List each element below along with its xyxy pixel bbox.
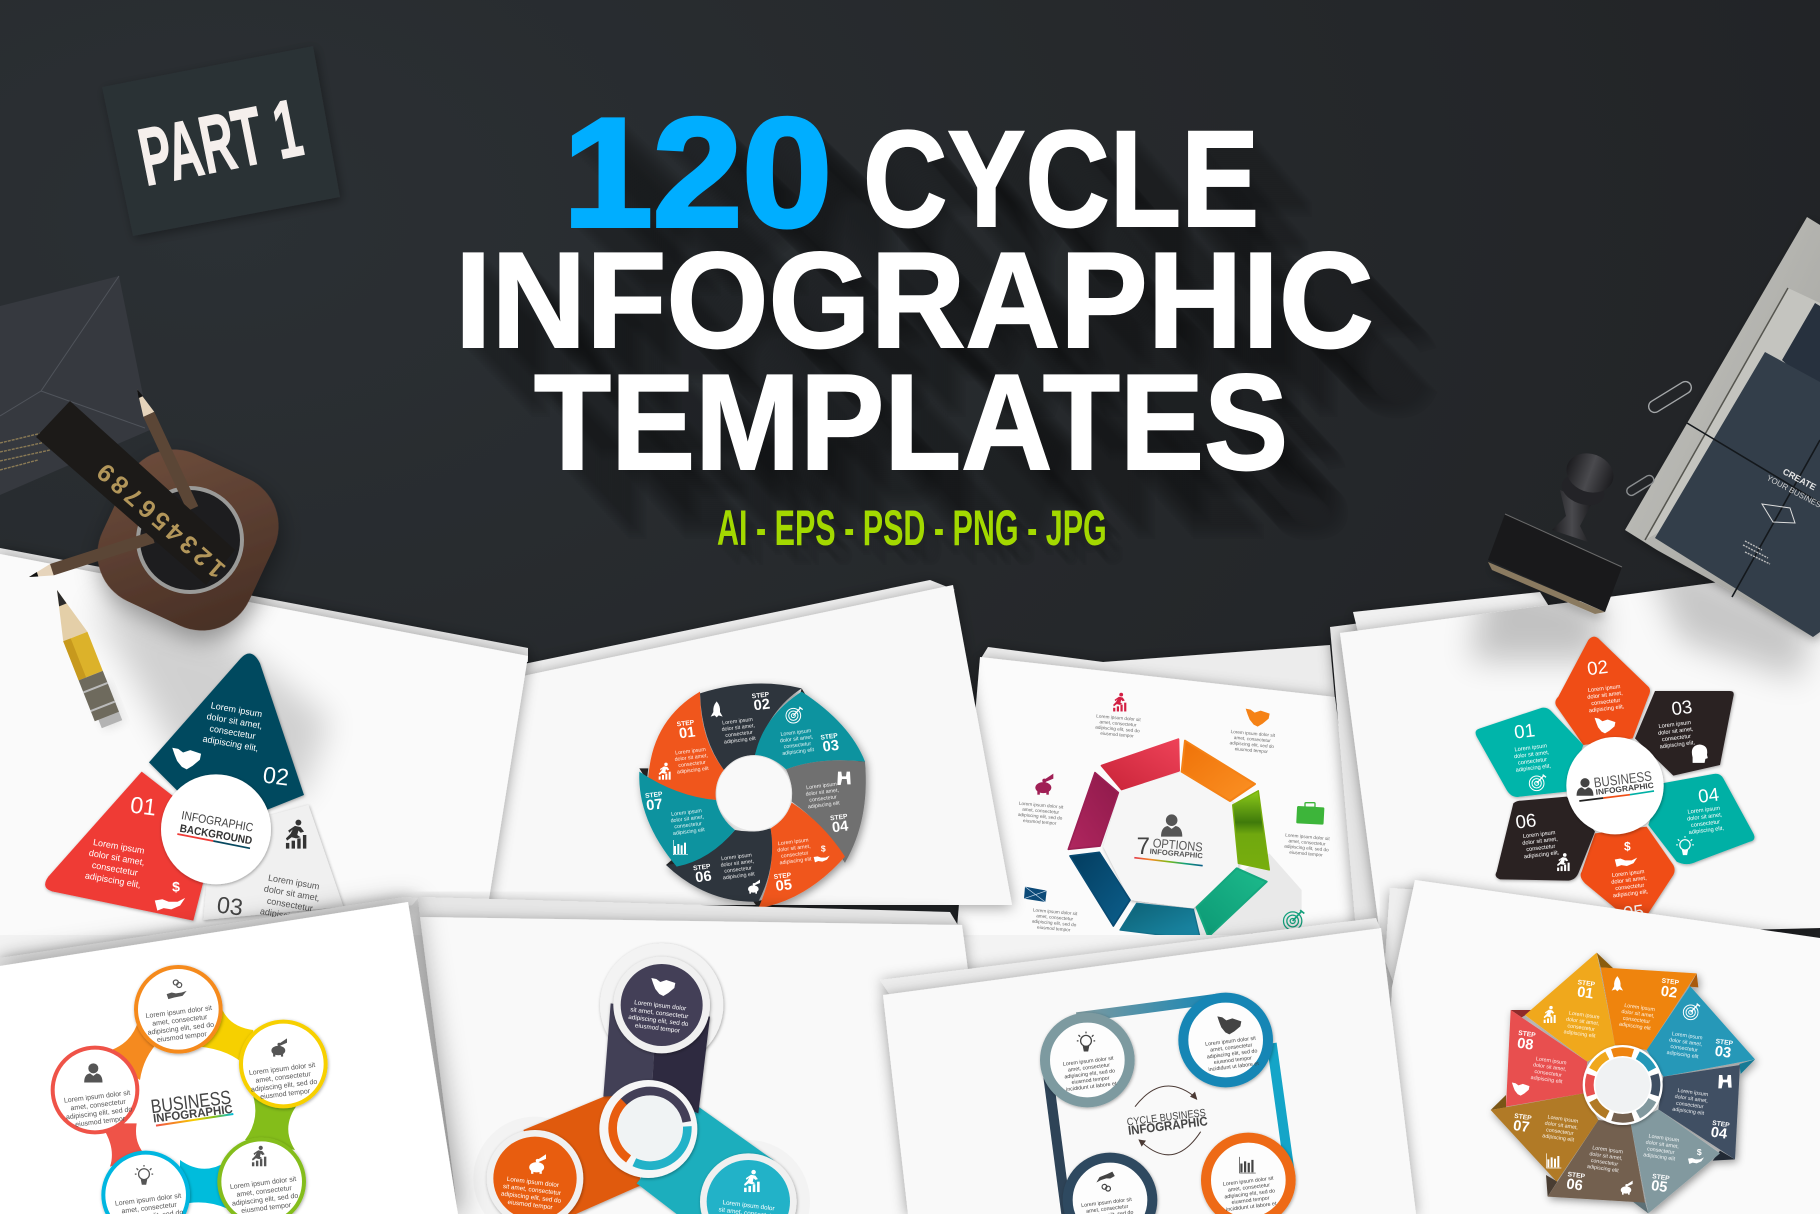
wheel segments bbox=[639, 684, 866, 908]
spiral seven-step wheel: $ bbox=[821, 844, 826, 854]
sheet: spiral back bbox=[490, 580, 955, 690]
loop infographic: incididunt ut labore et bbox=[1066, 1081, 1117, 1093]
flower infographic: dolor sit amet, bbox=[1522, 837, 1558, 847]
octagon infographic: STEP bbox=[1518, 1030, 1537, 1039]
loop infographic: amet, consectetur bbox=[1210, 1042, 1253, 1054]
centre title bbox=[1126, 1086, 1208, 1155]
five-ring infographic: Lorem ipsum dolor sit bbox=[64, 1090, 131, 1105]
panel: flower sheet bbox=[1340, 540, 1820, 935]
loop infographic: adipiscing elit, sed do bbox=[1064, 1068, 1115, 1080]
spiral seven-step wheel: adipiscing elit bbox=[723, 871, 756, 881]
centre circle: BACKGROUND bbox=[179, 823, 253, 847]
sheet: loop back bbox=[880, 918, 1380, 995]
triangle infographic: dolor sit amet, bbox=[263, 883, 321, 903]
orange disc: adipiscing elit, sed do bbox=[501, 1190, 562, 1205]
flower infographic: dolor sit amet, bbox=[1587, 691, 1623, 701]
centre circle: INFOGRAPHIC bbox=[180, 808, 255, 835]
octagon infographic: STEP bbox=[1712, 1120, 1731, 1129]
octagon infographic: adipiscing elit bbox=[1619, 1022, 1652, 1032]
octagon infographic: consectetur bbox=[1670, 1044, 1698, 1054]
heptagon infographic: adipiscing elit, sed do bbox=[1284, 844, 1329, 852]
spiral seven-step wheel: adipiscing elit bbox=[779, 856, 812, 866]
pencil: brown upper bbox=[132, 386, 198, 511]
octagon infographic: 07 bbox=[1512, 1118, 1530, 1136]
centre title: BUSINESS bbox=[150, 1088, 232, 1118]
octagon infographic: Lorem ipsum bbox=[1568, 1011, 1600, 1021]
flower infographic: consectetur bbox=[1691, 819, 1721, 829]
octagon infographic: 03 bbox=[1714, 1044, 1732, 1062]
segment 02 bbox=[149, 654, 304, 830]
orange disc: sit amet, consectetur bbox=[503, 1183, 561, 1197]
loop infographic: incididunt ut labore et bbox=[1226, 1201, 1277, 1213]
heptagon infographic: 7 bbox=[1137, 833, 1150, 860]
spiral seven-step wheel: Lorem ipsum bbox=[675, 747, 707, 757]
spiral seven-step wheel: STEP bbox=[751, 691, 770, 700]
flower infographic: dolor sit amet, bbox=[1687, 812, 1723, 823]
flower infographic bbox=[1476, 637, 1754, 924]
petal 02 bbox=[1555, 637, 1650, 745]
heptagon infographic: adipiscing elit, sed do bbox=[1095, 725, 1140, 733]
petal 04 bbox=[1648, 774, 1754, 864]
loop infographic: amet, consectetur bbox=[1068, 1062, 1111, 1074]
heptagon infographic: amet, consectetur bbox=[1022, 807, 1060, 815]
orange disc: Lorem ipsum dolor bbox=[506, 1176, 559, 1189]
spiral seven-step wheel: STEP bbox=[830, 813, 848, 822]
spiral seven-step wheel: 06 bbox=[694, 868, 713, 886]
octagon infographic: consectetur bbox=[1676, 1101, 1704, 1110]
ring: blue bbox=[103, 1153, 188, 1214]
stamp bbox=[1488, 447, 1622, 614]
sheet: triangle back bbox=[0, 548, 528, 662]
spiral seven-step wheel: dolor sit amet, bbox=[670, 814, 704, 824]
soft shadow behind holder bbox=[90, 600, 330, 800]
octagon infographic: dolor sit amet, bbox=[1589, 1151, 1623, 1162]
notebook: CREATE bbox=[1781, 466, 1818, 492]
octagon infographic: 02 bbox=[1660, 984, 1678, 1002]
three-arm infographic bbox=[473, 943, 810, 1214]
title: INFOGRAPHIC: INFOGRAPHIC bbox=[455, 224, 1374, 376]
flower infographic: adipiscing elit, bbox=[1688, 826, 1725, 836]
heptagon infographic: Lorem ipsum dolor sit bbox=[1285, 832, 1331, 841]
ring: grey bbox=[1045, 1018, 1130, 1102]
five-ring infographic: eiusmod tempor bbox=[260, 1088, 311, 1101]
loop infographic: Lorem ipsum dolor sit bbox=[1205, 1036, 1257, 1048]
heptagon infographic: Lorem ipsum dolor sit bbox=[1251, 932, 1297, 941]
octagon infographic: STEP bbox=[1514, 1113, 1533, 1122]
heptagon infographic: eiusmod tempor bbox=[1289, 850, 1323, 858]
octagon infographic: dolor sit amet, bbox=[1645, 1140, 1679, 1150]
octagon infographic: Lorem ipsum bbox=[1535, 1056, 1567, 1067]
flower infographic: 01 bbox=[1513, 719, 1536, 743]
segment 01 bbox=[45, 772, 217, 921]
flower centre: BUSINESS bbox=[1593, 768, 1653, 791]
navy disc bbox=[613, 957, 710, 1053]
heptagon infographic: eiusmod tempor bbox=[1023, 818, 1057, 826]
octagon infographic: $ bbox=[1697, 1147, 1702, 1157]
five-ring infographic: amet, consectetur bbox=[236, 1185, 293, 1199]
triangle infographic: Lorem ipsum bbox=[267, 873, 320, 891]
sheet: octagon back bbox=[1385, 888, 1420, 1000]
centre title: CYCLE BUSINESS bbox=[1126, 1107, 1206, 1128]
file formats: AI - EPS - PSD - PNG - JPG bbox=[717, 500, 1107, 556]
flower infographic: 04 bbox=[1697, 784, 1720, 807]
petal 06 bbox=[1496, 797, 1595, 881]
flower infographic: $ bbox=[1624, 840, 1631, 854]
loop infographic: Lorem ipsum dolor sit bbox=[1081, 1197, 1133, 1209]
octagon infographic bbox=[1491, 953, 1755, 1213]
hub bbox=[597, 1076, 703, 1181]
five-ring infographic: Lorem ipsum dolor sit bbox=[249, 1062, 316, 1077]
ring: green bbox=[219, 1139, 304, 1214]
octagon infographic: adipiscing elit bbox=[1530, 1075, 1563, 1085]
heptagon infographic: Lorem ipsum dolor sit bbox=[1019, 801, 1064, 810]
title bbox=[455, 86, 1423, 556]
spiral seven-step wheel: Lorem ipsum bbox=[722, 717, 754, 727]
navy disc: sit amet, consectetur bbox=[630, 1006, 689, 1020]
loop infographic: adipiscing elit, sed do bbox=[1206, 1048, 1258, 1060]
triangle infographic: adipiscing elit, bbox=[259, 906, 317, 926]
octagon infographic: 01 bbox=[1576, 984, 1594, 1002]
octagon infographic: adipiscing elit bbox=[1672, 1107, 1705, 1117]
part 1 card bbox=[102, 46, 340, 236]
paper clip 1 bbox=[1646, 379, 1694, 415]
triangle infographic: 02 bbox=[262, 762, 290, 791]
flower infographic: 05 bbox=[1622, 900, 1645, 924]
triangle infographic: 01 bbox=[129, 792, 158, 821]
spiral seven-step wheel: Lorem ipsum bbox=[671, 808, 703, 818]
octagon infographic: adipiscing elit bbox=[1666, 1050, 1699, 1060]
octagon infographic: Lorem ipsum bbox=[1624, 1003, 1656, 1013]
flower infographic: Lorem ipsum bbox=[1514, 743, 1548, 753]
centre title bbox=[150, 1088, 234, 1126]
flower infographic: Lorem ipsum bbox=[1612, 869, 1645, 879]
spiral seven-step wheel: adipiscing elit bbox=[782, 747, 815, 757]
five-ring infographic: amet, consectetur bbox=[255, 1071, 312, 1085]
flower infographic: 02 bbox=[1586, 656, 1609, 679]
part 1 card: PART 1 bbox=[132, 82, 309, 204]
centre ring bbox=[1578, 1040, 1667, 1130]
octagon infographic: STEP bbox=[1577, 979, 1596, 989]
spiral seven-step wheel: consectetur bbox=[725, 730, 753, 739]
heptagon infographic: adipiscing elit, sed do bbox=[1032, 919, 1077, 927]
centre circle bbox=[161, 774, 271, 884]
octagon infographic: dolor sit amet, bbox=[1566, 1017, 1600, 1027]
spiral seven-step wheel: dolor sit amet, bbox=[805, 788, 839, 798]
octagon infographic: adipiscing elit bbox=[1643, 1152, 1676, 1163]
spiral seven-step wheel: consectetur bbox=[809, 794, 837, 804]
heptagon infographic: Lorem ipsum dolor sit bbox=[1230, 729, 1276, 738]
triangle infographic: adipiscing elit, bbox=[202, 734, 259, 753]
spiral seven-step wheel: STEP bbox=[645, 791, 663, 800]
spiral seven-step wheel: dolor sit amet, bbox=[720, 859, 754, 869]
heptagon infographic: amet, consectetur bbox=[1234, 735, 1271, 743]
orange disc: eiusmod tempor bbox=[507, 1199, 553, 1211]
flaps bbox=[1491, 953, 1755, 1213]
panel: business sheet bbox=[0, 902, 458, 1214]
octagon infographic: 04 bbox=[1710, 1125, 1729, 1143]
triangle infographic: consectetur bbox=[209, 723, 256, 741]
loop infographic bbox=[1045, 998, 1291, 1214]
spiral seven-step wheel: STEP bbox=[820, 733, 839, 742]
sheet: flower back 1 bbox=[1330, 600, 1570, 1000]
heptagon infographic: adipiscing elit, sed do bbox=[1229, 740, 1275, 749]
flower infographic: consectetur bbox=[1518, 757, 1548, 767]
orange arm bbox=[523, 1090, 642, 1214]
triangle infographic: 03 bbox=[216, 892, 244, 921]
octagon infographic: consectetur bbox=[1534, 1069, 1562, 1079]
flower infographic: consectetur bbox=[1526, 844, 1556, 853]
flower infographic: consectetur bbox=[1662, 734, 1692, 743]
octagon infographic: Lorem ipsum bbox=[1677, 1088, 1709, 1098]
sheet: flower back 2 bbox=[1353, 592, 1570, 640]
octagon infographic: STEP bbox=[1652, 1173, 1671, 1183]
spiral seven-step wheel: Lorem ipsum bbox=[778, 837, 809, 847]
flower infographic: adipiscing elit, bbox=[1613, 889, 1649, 899]
ring: orange bbox=[136, 967, 221, 1052]
ruler bbox=[36, 401, 235, 585]
panel: heptagon sheet bbox=[950, 657, 1375, 1010]
sheet: heptagon back bbox=[980, 645, 1335, 700]
octagon infographic: STEP bbox=[1715, 1038, 1734, 1048]
spiral seven-step wheel: adipiscing elit bbox=[673, 827, 706, 837]
segment 03 bbox=[203, 805, 343, 920]
centre title: INFOGRAPHIC bbox=[152, 1102, 234, 1126]
loop infographic: adipiscing elit, sed do bbox=[1224, 1188, 1275, 1200]
flower infographic: adipiscing elit, bbox=[1515, 763, 1552, 774]
teal disc: Lorem ipsum dolor bbox=[722, 1199, 775, 1213]
spiral seven-step wheel: consectetur bbox=[724, 865, 752, 875]
octagon infographic: 06 bbox=[1565, 1176, 1584, 1194]
heptagon infographic: Lorem ipsum dolor sit bbox=[1033, 907, 1078, 916]
spiral seven-step wheel: consectetur bbox=[674, 821, 702, 830]
paper clip 2 bbox=[1625, 474, 1655, 497]
panel: loop sheet bbox=[883, 928, 1416, 1214]
five-ring infographic: amet, consectetur bbox=[70, 1099, 127, 1112]
octagon infographic: 08 bbox=[1516, 1036, 1534, 1054]
ring: orange bbox=[1206, 1138, 1291, 1214]
navy disc: adipiscing elit, sed do bbox=[628, 1014, 689, 1028]
notebook bbox=[1625, 217, 1820, 637]
disc halos bbox=[473, 943, 810, 1214]
spiral seven-step wheel: STEP bbox=[773, 872, 792, 881]
flower infographic: adipiscing elit, bbox=[1524, 850, 1560, 860]
connecting bands bbox=[1048, 998, 1289, 1214]
panel: spiral sheet bbox=[470, 585, 1012, 908]
spiral seven-step wheel: Lorem ipsum bbox=[721, 852, 753, 862]
centre title: INFOGRAPHIC bbox=[1127, 1114, 1208, 1138]
loop infographic: Lorem ipsum dolor sit bbox=[1063, 1056, 1114, 1068]
octagon infographic: adipiscing elit bbox=[1563, 1029, 1596, 1040]
spiral seven-step wheel: STEP bbox=[676, 719, 695, 728]
octagon infographic: adipiscing elit bbox=[1587, 1164, 1620, 1174]
heptagon infographic: amet, consectetur bbox=[1036, 913, 1074, 922]
octagon infographic: consectetur bbox=[1622, 1016, 1651, 1025]
octagon infographic: consectetur bbox=[1546, 1127, 1574, 1137]
sheet: business back bbox=[0, 897, 418, 970]
triangle infographic: consectetur bbox=[91, 860, 139, 878]
octagon infographic: adipiscing elit bbox=[1542, 1133, 1575, 1144]
heptagon infographic: adipiscing elit, sed do bbox=[1018, 812, 1063, 821]
heptagon infographic: INFOGRAPHIC bbox=[1149, 847, 1204, 860]
octagon infographic: Lorem ipsum bbox=[1592, 1145, 1624, 1156]
spiral seven-step wheel: STEP bbox=[693, 863, 711, 872]
flower infographic: adipiscing elit, bbox=[1589, 704, 1625, 714]
octagon infographic: Lorem ipsum bbox=[1671, 1031, 1703, 1042]
loop infographic: incididunt ut labore et bbox=[1208, 1061, 1260, 1073]
triangle infographic: Lorem ipsum bbox=[210, 700, 263, 719]
octagon infographic: dolor sit amet, bbox=[1533, 1062, 1567, 1073]
navy disc: Lorem ipsum dolor bbox=[634, 999, 687, 1013]
heptagon infographic: Lorem ipsum dolor sit bbox=[1096, 713, 1142, 722]
loop infographic: eiusmod tempor bbox=[1231, 1195, 1270, 1206]
flower infographic: dolor sit amet, bbox=[1611, 876, 1647, 886]
title: 120: 120 bbox=[563, 86, 832, 259]
teal disc bbox=[700, 1153, 797, 1214]
spiral seven-step wheel: 05 bbox=[775, 877, 793, 895]
spiral seven-step wheel: consectetur bbox=[781, 850, 809, 860]
octagon infographic: Lorem ipsum bbox=[1648, 1134, 1680, 1144]
five-ring infographic: eiusmod tempor bbox=[157, 1031, 208, 1044]
spiral seven-step wheel: dolor sit amet, bbox=[777, 844, 811, 854]
five-ring infographic: amet, consectetur bbox=[152, 1014, 208, 1028]
panel: triangle sheet bbox=[0, 554, 528, 985]
pen holder bbox=[80, 432, 296, 648]
triangle infographic: $ bbox=[172, 879, 180, 895]
navy disc: eiusmod tempor bbox=[634, 1022, 680, 1035]
pencil: brown lower bbox=[27, 532, 155, 583]
flower infographic: Lorem ipsum bbox=[1523, 830, 1556, 840]
five-ring infographic: eiusmod tempor bbox=[75, 1116, 126, 1129]
spiral seven-step wheel: adipiscing elit bbox=[808, 800, 841, 810]
flower infographic: Lorem ipsum bbox=[1588, 684, 1621, 694]
petal 03 bbox=[1635, 691, 1734, 776]
octagon infographic: dolor sit amet, bbox=[1674, 1094, 1708, 1105]
octagon infographic: consectetur bbox=[1647, 1146, 1675, 1156]
spiral seven-step wheel: 02 bbox=[753, 696, 771, 714]
spiral seven-step wheel: dolor sit amet, bbox=[780, 734, 814, 744]
flower infographic: adipiscing elit, bbox=[1659, 740, 1696, 750]
five-ring infographic: Lorem ipsum dolor sit bbox=[145, 1005, 212, 1020]
triangle infographic: Lorem ipsum bbox=[92, 837, 145, 856]
five-ring infographic: adipiscing elit, sed do bbox=[232, 1193, 299, 1208]
octagon infographic: dolor sit amet, bbox=[1669, 1037, 1703, 1048]
petal 01 bbox=[1476, 708, 1583, 797]
spiral seven-step wheel: consectetur bbox=[783, 741, 812, 750]
sheet: three-arm back bbox=[418, 897, 962, 932]
spiral seven-step wheel: 03 bbox=[822, 738, 840, 756]
panel: octagon sheet bbox=[1381, 880, 1820, 1214]
ring: yellow bbox=[241, 1022, 326, 1106]
panel: three-arm sheet bbox=[420, 917, 1000, 1214]
spiral seven-step wheel: adipiscing elit bbox=[677, 766, 710, 776]
octagon infographic: dolor sit amet, bbox=[1621, 1009, 1655, 1020]
lower backing sheets bbox=[0, 935, 1747, 1214]
five-ring infographic: Lorem ipsum dolor sit bbox=[115, 1193, 182, 1208]
navy arm bbox=[603, 1003, 710, 1113]
five-ring infographic: Lorem ipsum dolor sit bbox=[230, 1176, 297, 1191]
spiral seven-step wheel: 04 bbox=[831, 818, 850, 836]
petal 05 bbox=[1581, 827, 1675, 918]
loop infographic: eiusmod tempor bbox=[1214, 1055, 1252, 1066]
heptagon infographic: eiusmod tempor bbox=[1234, 746, 1269, 754]
spiral seven-step wheel: 01 bbox=[678, 724, 696, 742]
flower infographic: consectetur bbox=[1615, 883, 1645, 892]
spiral seven-step wheel: adipiscing elit bbox=[724, 736, 757, 746]
triangle infographic: dolor sit amet, bbox=[88, 848, 146, 867]
triangle infographic: consectetur bbox=[266, 896, 314, 914]
triangle infographic bbox=[45, 654, 343, 926]
flower infographic: Lorem ipsum bbox=[1687, 806, 1721, 816]
ring: blue bbox=[1183, 998, 1268, 1082]
pencil: yellow bbox=[45, 585, 122, 730]
teal arm bbox=[637, 1107, 773, 1214]
five-ring infographic: adipiscing elit, sed do bbox=[251, 1079, 318, 1094]
octagon infographic: consectetur bbox=[1567, 1023, 1595, 1033]
heptagon infographic: amet, consectetur bbox=[1099, 719, 1137, 728]
octagon infographic: consectetur bbox=[1590, 1158, 1619, 1168]
flower infographic: consectetur bbox=[1591, 698, 1621, 707]
ring: red bbox=[53, 1048, 137, 1132]
five-ring infographic: adipiscing elit, sed do bbox=[66, 1106, 133, 1121]
spiral seven-step wheel bbox=[639, 684, 866, 908]
flower infographic: 06 bbox=[1514, 809, 1537, 833]
flower infographic: 03 bbox=[1670, 696, 1693, 719]
ruler: 1 2 3 4 5 6 7 8 9 bbox=[92, 458, 231, 584]
flower infographic: dolor sit amet, bbox=[1658, 727, 1694, 737]
shadows cast on flower sheet bbox=[1460, 582, 1820, 687]
heptagon infographic: OPTIONS bbox=[1152, 836, 1203, 854]
octagon infographic: dolor sit amet, bbox=[1544, 1121, 1578, 1131]
five-ring infographic bbox=[53, 967, 326, 1214]
octagon infographic: 05 bbox=[1650, 1178, 1668, 1196]
ring: navy bbox=[1068, 1158, 1152, 1214]
heptagon infographic: eiusmod tempor bbox=[1100, 731, 1134, 739]
heptagon infographic: amet, consectetur bbox=[1288, 838, 1326, 847]
spiral seven-step wheel: Lorem ipsum bbox=[780, 728, 812, 738]
title: TEMPLATES: TEMPLATES bbox=[534, 346, 1288, 498]
flower infographic: dolor sit amet, bbox=[1514, 750, 1550, 760]
spiral seven-step wheel: dolor sit amet, bbox=[674, 753, 708, 763]
connectors bbox=[100, 1003, 298, 1208]
flower centre: INFOGRAPHIC bbox=[1595, 781, 1654, 797]
orange disc bbox=[487, 1130, 583, 1214]
triangle infographic: dolor sit amet, bbox=[206, 711, 263, 731]
title: CYCLE: CYCLE bbox=[863, 103, 1259, 256]
octagon infographic: Lorem ipsum bbox=[1547, 1115, 1579, 1125]
spiral seven-step wheel: consectetur bbox=[678, 760, 706, 769]
five-ring infographic: adipiscing elit, sed do bbox=[147, 1022, 215, 1037]
loop infographic: amet, consectetur bbox=[1228, 1182, 1271, 1194]
envelope bbox=[0, 276, 150, 495]
loop infographic: Lorem ipsum dolor sit bbox=[1223, 1176, 1274, 1188]
flower centre bbox=[1566, 737, 1664, 834]
triangle infographic: adipiscing elit, bbox=[84, 870, 142, 890]
spiral seven-step wheel: Lorem ipsum bbox=[806, 781, 838, 791]
octagon infographic: STEP bbox=[1567, 1171, 1586, 1181]
spiral seven-step wheel: dolor sit amet, bbox=[721, 723, 755, 733]
spiral seven-step wheel: 07 bbox=[645, 796, 664, 814]
heptagon infographic: eiusmod tempor bbox=[1037, 925, 1071, 933]
octagon infographic: STEP bbox=[1661, 978, 1680, 987]
flower infographic: Lorem ipsum bbox=[1658, 720, 1692, 730]
heptagon infographic bbox=[1017, 693, 1331, 950]
loop infographic: eiusmod tempor bbox=[1071, 1075, 1110, 1086]
